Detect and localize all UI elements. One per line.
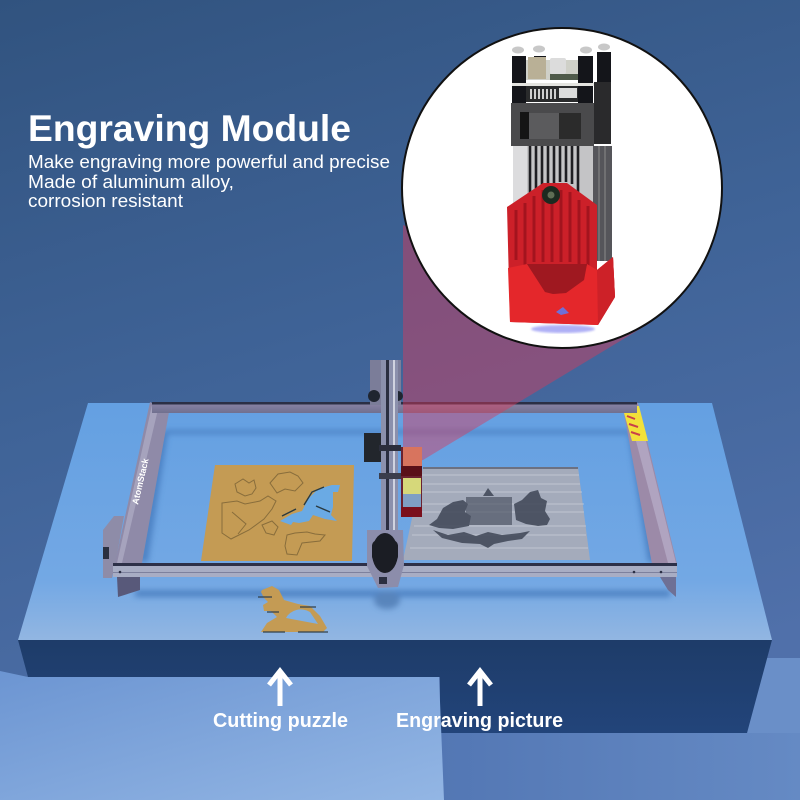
heat sink bbox=[513, 144, 612, 269]
bottom rail bbox=[113, 563, 677, 577]
side floor right bbox=[747, 658, 800, 733]
black pillars bbox=[512, 52, 611, 144]
table top surface bbox=[18, 403, 772, 640]
loose puzzle piece bbox=[258, 586, 328, 632]
floor lower right bbox=[440, 733, 800, 800]
logo on left rail: AtomStack bbox=[130, 456, 151, 505]
description bbox=[28, 152, 390, 211]
laser head on gantry bbox=[401, 447, 422, 517]
table front face bbox=[18, 640, 772, 733]
thumb screw bbox=[542, 186, 560, 204]
right rail bbox=[622, 403, 677, 564]
laser beam bbox=[403, 225, 650, 465]
lower red front bbox=[508, 257, 615, 325]
gantry top motor block bbox=[370, 360, 401, 405]
gantry and laser head bbox=[364, 360, 422, 588]
circuit board bbox=[512, 57, 594, 102]
blue glow bbox=[531, 325, 595, 333]
stepper motor bbox=[364, 433, 383, 462]
description: Made of aluminum alloy, bbox=[28, 172, 234, 192]
arrow: engraving picture bbox=[469, 671, 491, 706]
title: Engraving Module bbox=[28, 108, 351, 149]
arrow: cutting puzzle bbox=[269, 671, 291, 706]
engraved metal sheet bbox=[403, 467, 590, 560]
description: corrosion resistant bbox=[28, 191, 183, 211]
engraving module product bbox=[507, 44, 615, 333]
front carriage bbox=[367, 530, 404, 588]
fan housing bbox=[511, 82, 611, 146]
pillar caps bbox=[512, 44, 610, 54]
table block bbox=[0, 403, 800, 800]
blue indicator bbox=[556, 307, 569, 315]
zoom circle bbox=[402, 28, 722, 348]
wood sheet with puzzle bbox=[201, 465, 354, 561]
floor lower left block bbox=[0, 671, 444, 800]
gantry rail bbox=[381, 360, 398, 532]
left rail bbox=[115, 402, 169, 563]
label: cutting puzzle: Cutting puzzle bbox=[213, 710, 348, 732]
right foot bbox=[660, 577, 676, 597]
left end block bbox=[103, 516, 124, 578]
engraved crest bbox=[429, 488, 550, 548]
left foot bbox=[117, 577, 140, 597]
label: engraving picture: Engraving picture bbox=[396, 710, 563, 732]
laser machine frame bbox=[103, 402, 677, 597]
top rail bbox=[152, 403, 637, 413]
blue cutouts bbox=[280, 485, 340, 525]
shadows on table bbox=[135, 430, 670, 609]
yellow warning label bbox=[622, 406, 648, 441]
red cover bbox=[507, 183, 615, 325]
description: Make engraving more powerful and precise bbox=[28, 152, 390, 172]
